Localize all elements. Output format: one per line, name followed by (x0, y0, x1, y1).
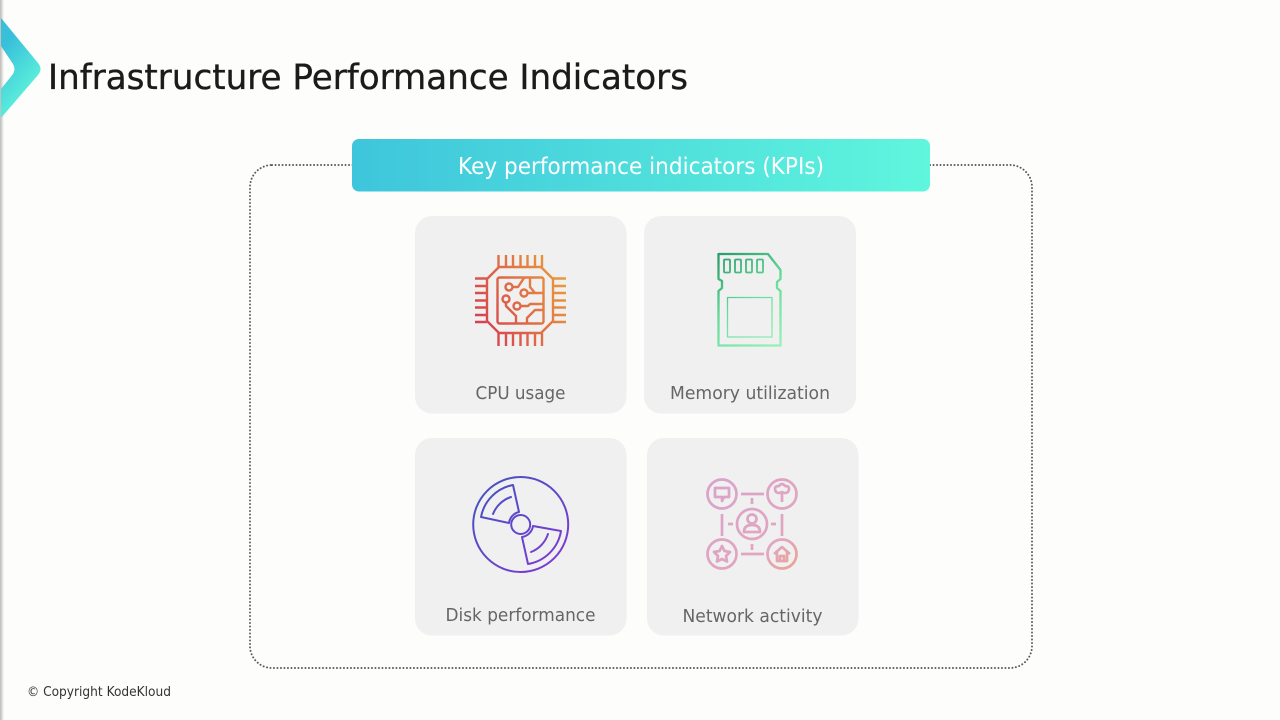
panel: Memory utilization (644, 216, 856, 414)
label: Disk performance: Disk performance (446, 605, 596, 626)
icon: memory card (718, 254, 780, 346)
title: Infrastructure Performance Indicators (48, 58, 688, 98)
panel: Network activity (647, 438, 858, 636)
icon: network (708, 480, 796, 568)
icon: CPU chip (475, 255, 566, 346)
logo chevron (1, 18, 40, 118)
icon: disk (473, 477, 568, 572)
label: Network activity: Network activity (682, 606, 823, 627)
panel: Disk performance (415, 438, 626, 636)
label: CPU usage: CPU usage (476, 383, 566, 404)
banner label: Key performance indicators (KPIs) (458, 154, 824, 180)
panel: CPU usage (415, 216, 626, 414)
dotted KPI frame (250, 165, 1032, 668)
label: Memory utilization: Memory utilization (670, 383, 830, 404)
copyright footer: © Copyright KodeKloud (27, 685, 171, 700)
banner: key performance indicators (352, 139, 930, 192)
